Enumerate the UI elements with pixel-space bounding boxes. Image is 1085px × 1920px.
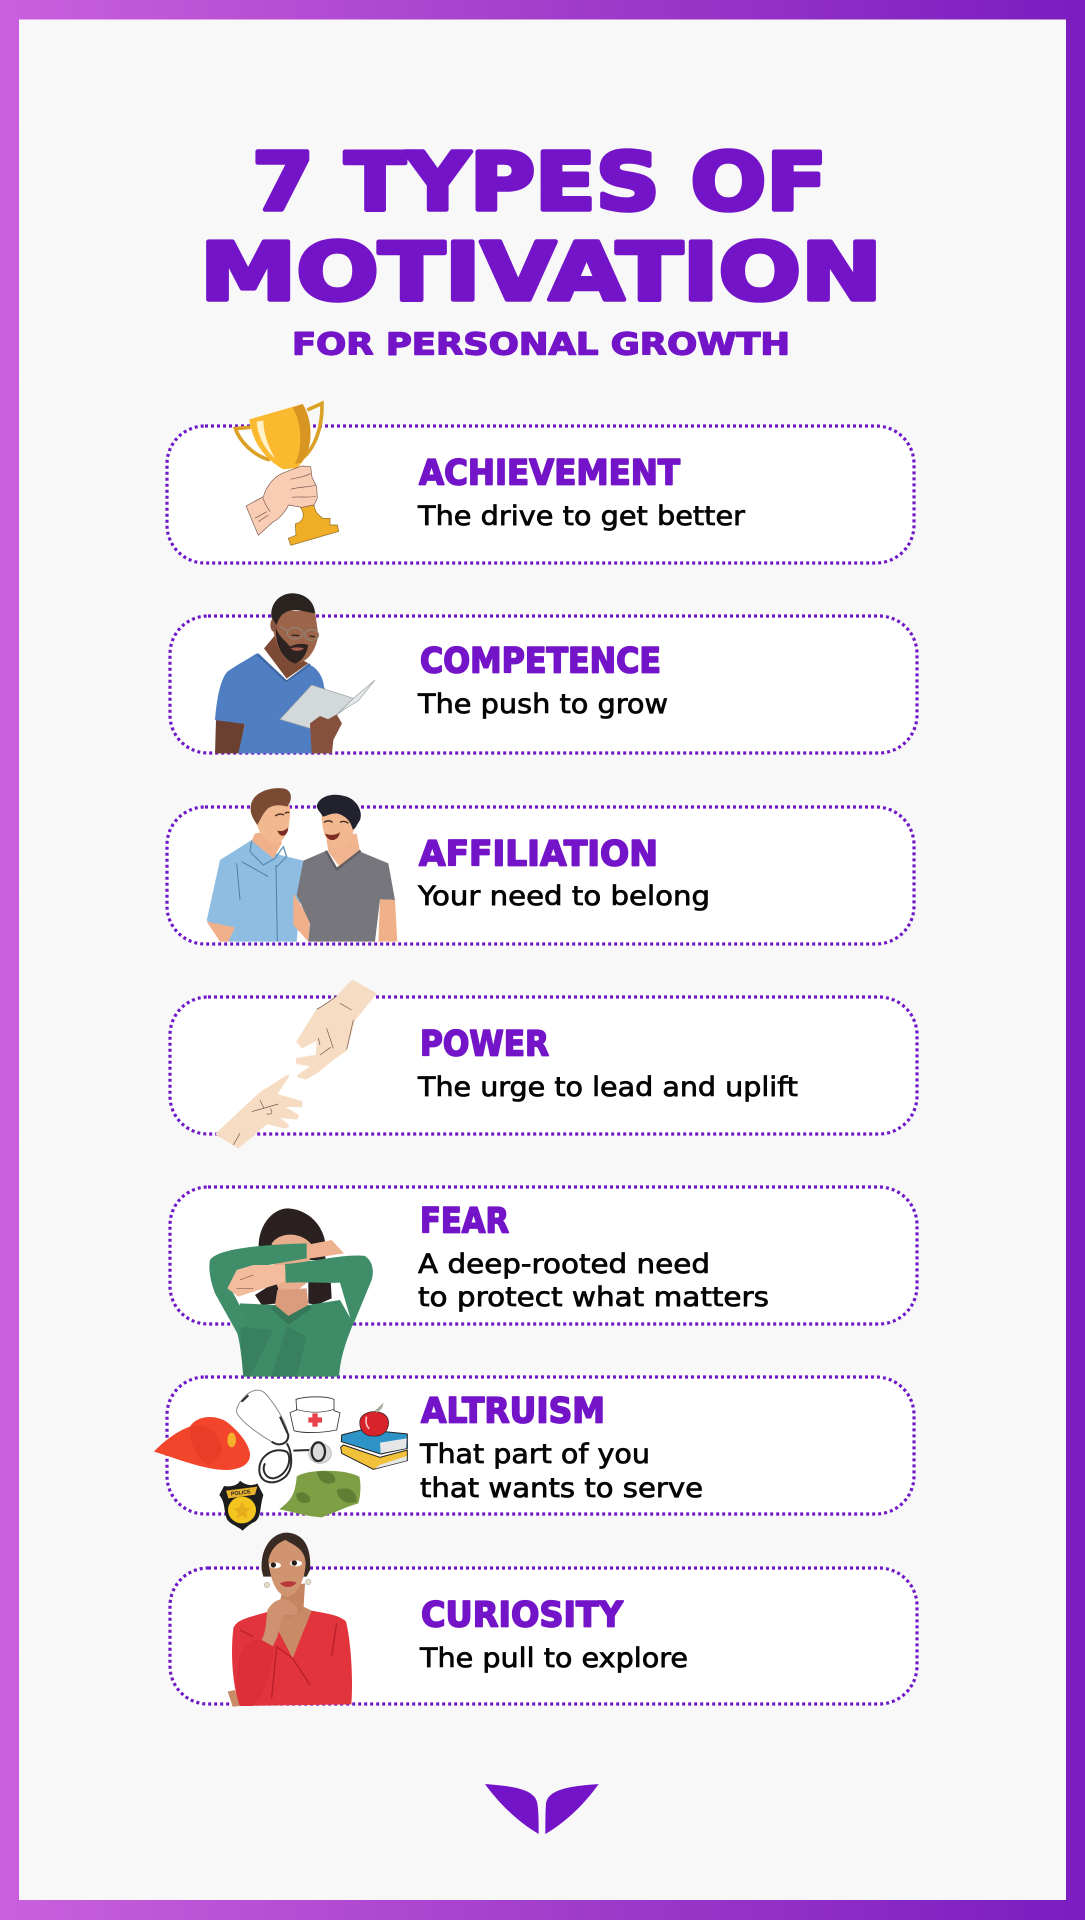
icon: police badge: POLICE	[231, 1489, 252, 1498]
icon: nurse cap	[290, 1397, 340, 1433]
icon: hand holding trophy	[235, 403, 339, 545]
icon: police badge	[219, 1481, 263, 1531]
text: power	[417, 1024, 798, 1103]
icon: reaching hands	[217, 981, 375, 1147]
text: altruism	[419, 1392, 703, 1504]
panel: curiosity card	[170, 1568, 917, 1704]
panel: competence card	[170, 616, 917, 753]
icon: woman covering her eyes	[209, 1208, 373, 1377]
text: fear: to protect what matters	[418, 1282, 769, 1313]
title	[200, 136, 882, 318]
text: curiosity: The pull to explore	[419, 1643, 688, 1674]
text: fear: A deep-rooted need	[418, 1249, 710, 1280]
panel: power card	[170, 997, 917, 1134]
text: curiosity	[419, 1596, 688, 1674]
text: achievement: ACHIEVEMENT	[419, 454, 680, 494]
icon: service hats, stethoscope, badge and books	[154, 1390, 407, 1531]
icon: stethoscope	[237, 1390, 331, 1482]
title: 7 TYPES OF	[252, 136, 827, 228]
panel: fear card	[170, 1187, 917, 1324]
text: fear	[418, 1202, 769, 1313]
text: achievement: The drive to get better	[417, 501, 746, 532]
panel: affiliation card	[167, 807, 914, 944]
text: power: The urge to lead and uplift	[417, 1072, 798, 1103]
text: affiliation: Your need to belong	[417, 881, 710, 912]
icon: thoughtful woman	[228, 1533, 352, 1707]
text: power: POWER	[420, 1024, 549, 1064]
text: affiliation: AFFILIATION	[419, 834, 658, 874]
icon: man reading a book	[215, 593, 375, 753]
subtitle: FOR PERSONAL GROWTH	[292, 328, 790, 362]
icon: apple on books	[341, 1403, 407, 1469]
text: achievement	[417, 454, 746, 532]
title: MOTIVATION	[200, 226, 882, 318]
icon: two friends laughing	[207, 788, 397, 942]
text: curiosity: CURIOSITY	[421, 1596, 624, 1636]
text: competence: The push to grow	[417, 689, 668, 720]
panel: achievement card	[167, 426, 914, 563]
icon: military cap	[279, 1471, 360, 1517]
text: altruism: that wants to serve	[420, 1473, 703, 1504]
icon: firefighter helmet	[154, 1417, 250, 1470]
text: altruism: That part of you	[419, 1439, 650, 1470]
panel: altruism card	[167, 1377, 914, 1514]
text: competence: COMPETENCE	[420, 642, 661, 682]
text: affiliation	[417, 834, 710, 912]
icon: logo leaves	[485, 1784, 599, 1834]
text: competence	[417, 642, 668, 720]
text: altruism: ALTRUISM	[421, 1392, 605, 1432]
text: fear: FEAR	[420, 1202, 509, 1242]
